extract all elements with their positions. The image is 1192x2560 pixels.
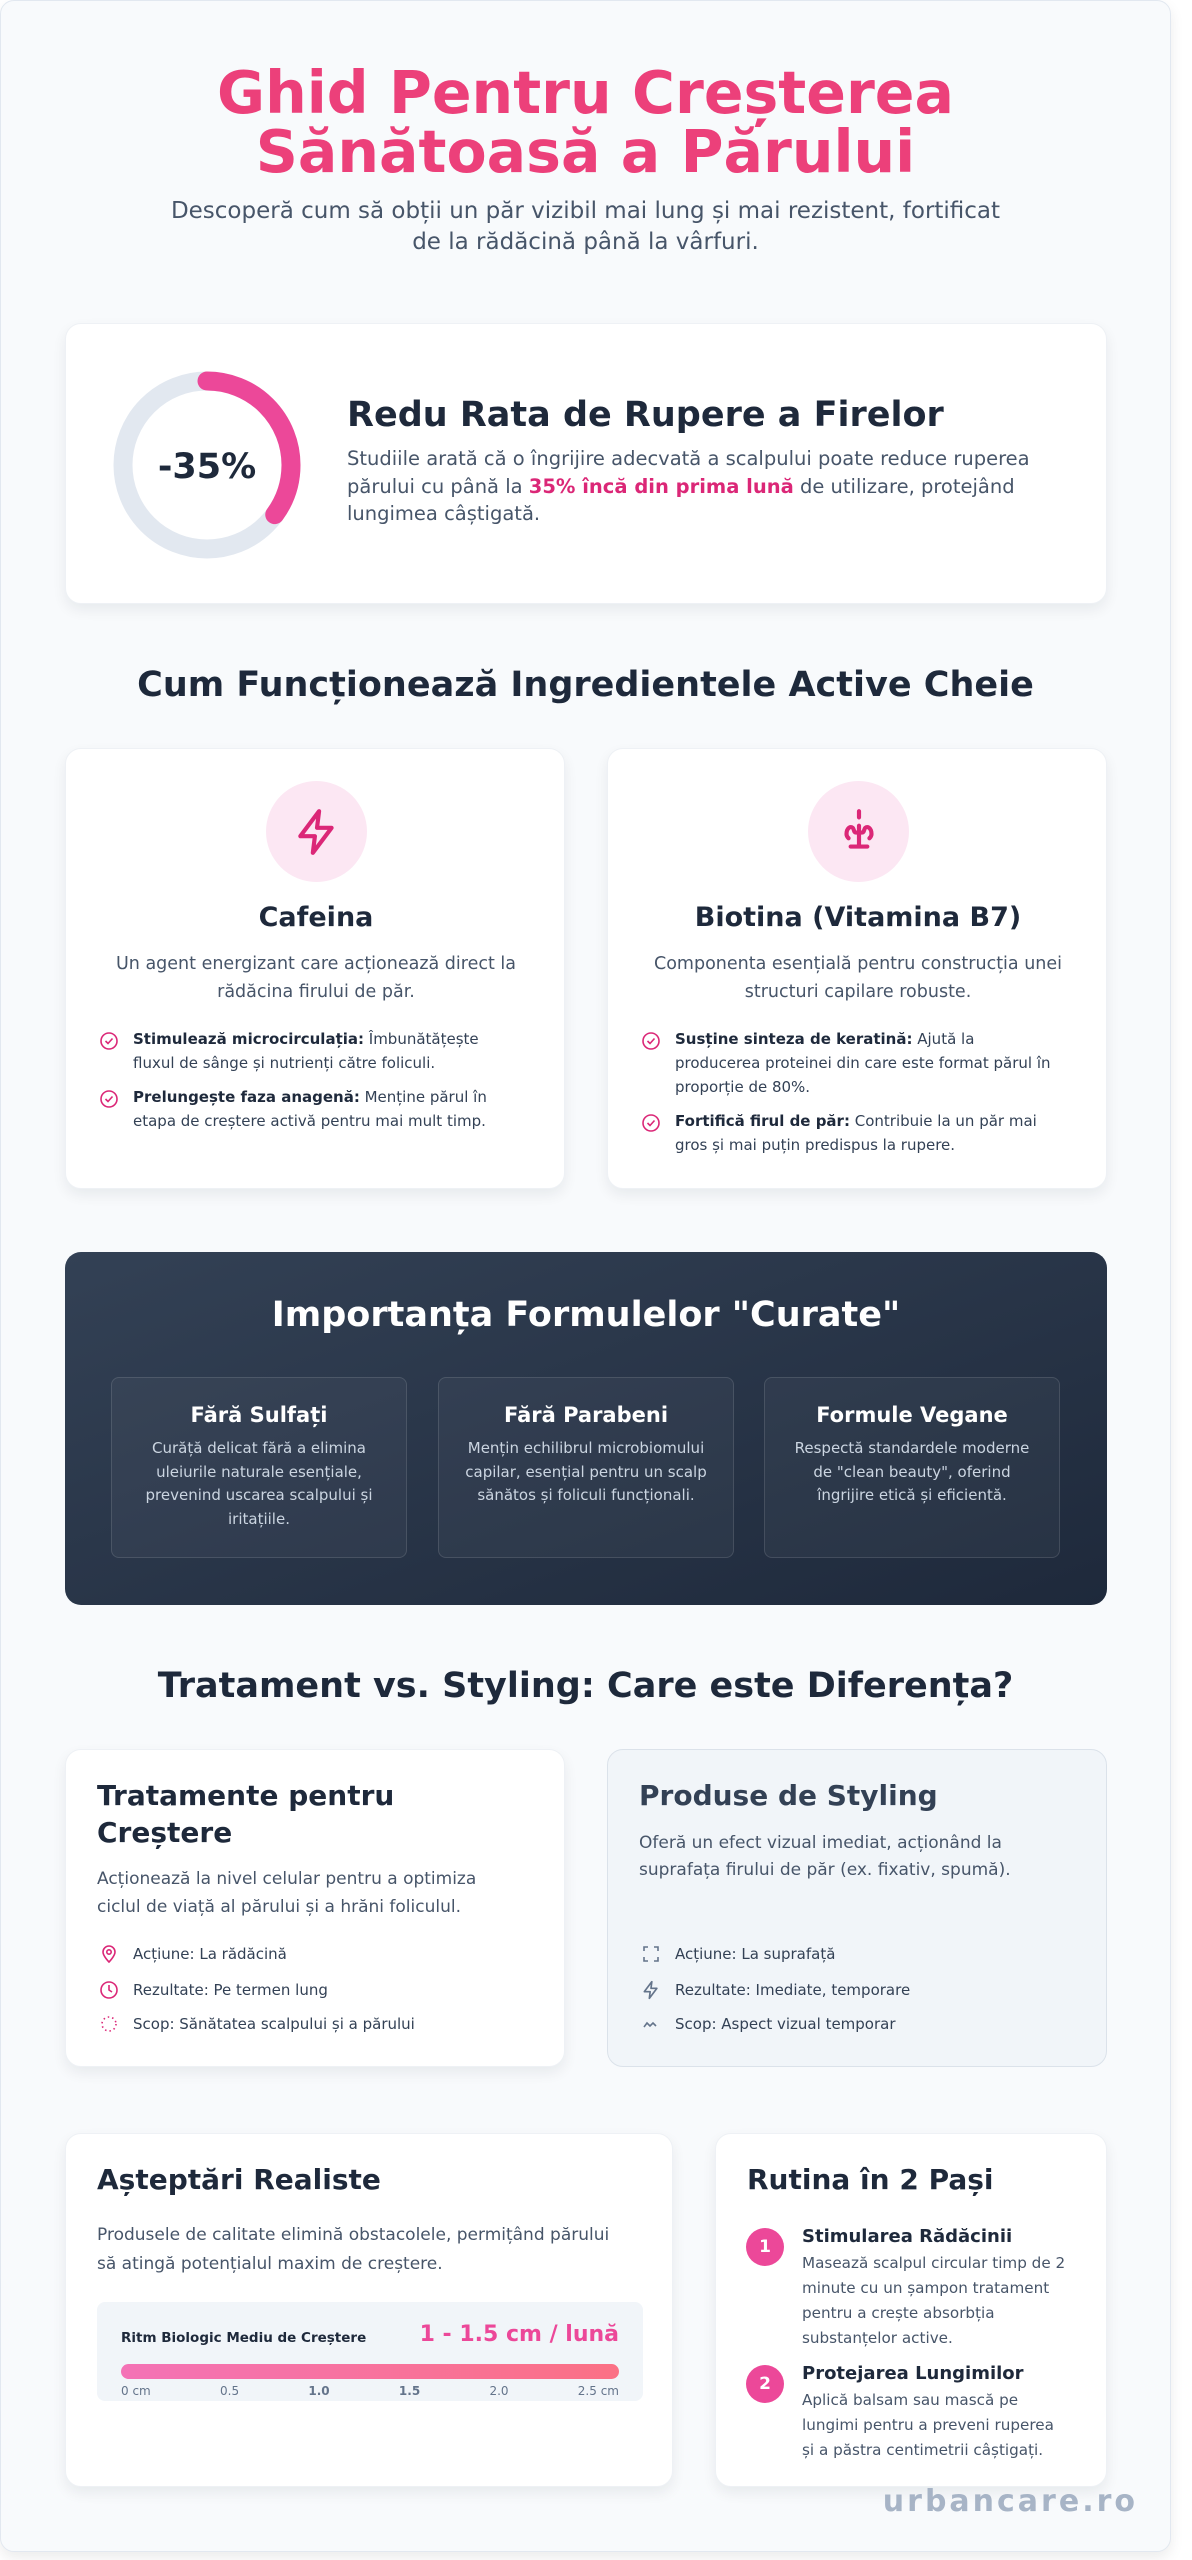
feature list: Rezultate: Imediate, temporare [675,1981,910,1999]
heading: treatment vs styling: Tratament vs. Styling: Care este Diferența? [158,1666,1013,1706]
growth bar chart: 0.5 [220,2384,239,2398]
stat heading: Redu Rata de Rupere a Firelor [347,395,944,435]
step 1: Masează scalpul circular timp de 2 minute cu un șampon tratament pentru a crește absorbția substanțelor active. [802,2254,1065,2347]
subtitle [171,198,1000,255]
step 2: 2 [759,2374,771,2394]
heading: Importanța Formulelor "Curate" [272,1295,900,1335]
box: sulfati: Fără Sulfați [191,1403,327,1427]
step 1 [746,2226,1065,2347]
title: Produse de Styling [639,1779,938,1812]
title: Cafeina [259,902,373,933]
brand watermark: urbancare.ro [883,2484,1138,2519]
donut chart: -35% [158,447,256,487]
feature list: Acțiune: La rădăcină [133,1945,287,1963]
growth bar chart: 2.0 [489,2384,509,2398]
growth bar chart: 1.0 [308,2384,330,2398]
bullet list: Susține sinteza de keratină: Ajută la producerea proteinei din care este format părul în proporție de 80%. [675,1030,1051,1096]
bullet list [100,1030,487,1130]
title: Tratamente pentru Creștere [97,1779,394,1849]
panel: treatments [65,1749,565,2067]
description: Produsele de calitate elimină obstacolele, permițând părului să atingă potențialul maxim de creștere. [97,2225,609,2274]
feature list: Rezultate: Pe termen lung [133,1981,328,1999]
description: Acționează la nivel celular pentru a optimiza ciclul de viață al părului și a hrăni foliculul. [97,1869,476,1917]
panel: styling [607,1749,1107,2067]
feature list: Scop: Aspect vizual temporar [675,2015,896,2033]
growth bar chart: 1.5 [399,2384,420,2398]
box: sulfati [111,1377,407,1558]
subtitle: Descoperă cum să obții un păr vizibil mai lung și mai rezistent, fortificat [171,198,1000,224]
growth bar chart: 1 - 1.5 cm / lună [420,2322,619,2347]
feature list [100,1945,415,2033]
step 1: Stimularea Rădăcinii [802,2226,1012,2247]
title [217,59,954,186]
panel: cafeina [65,748,565,1189]
feature list: Scop: Sănătatea scalpului și a părului [133,2015,415,2033]
growth bar chart: 0 cm [121,2384,151,2398]
feature list: Acțiune: La suprafață [675,1945,835,1963]
panel: realistic expectations [65,2133,673,2487]
bullet list: Prelungește faza anagenă: Menține părul în etapa de creștere activă pentru mai mult timp. [133,1088,487,1130]
description: Un agent energizant care acționează direct la rădăcina firului de păr. [116,954,516,1002]
step 2 [746,2363,1054,2459]
bullet list [642,1030,1051,1154]
step 2: Protejarea Lungimilor [802,2363,1024,2384]
growth bar chart [97,2302,643,2401]
title: Rutina în 2 Pași [747,2163,994,2196]
heading: ingredients: Cum Funcționează Ingredientele Active Cheie [137,665,1034,705]
title: Așteptări Realiste [97,2163,381,2196]
step 2: Aplică balsam sau mască pe lungimi pentru a preveni ruperea și a păstra centimetrii câștigați. [802,2391,1054,2459]
growth bar chart: Ritm Biologic Mediu de Creștere [121,2330,366,2346]
donut chart [114,372,300,558]
step 1: 1 [759,2237,771,2257]
panel: clean formulas [65,1252,1107,1605]
title: Sănătoasă a Părului [256,118,915,186]
panel: 2-step routine [715,2133,1107,2487]
icon: molecule [808,781,909,882]
bullet list: Stimulează microcirculația: Îmbunătățește fluxul de sânge și nutrienți către foliculi. [133,1030,479,1072]
panel: biotina [607,748,1107,1189]
stat text: Studiile arată că o îngrijire adecvată a scalpului poate reduce ruperea părului cu până la 35% încă din prima lună de utilizare, protejând lungimea câștigată. [347,447,1030,525]
box: vegane: Respectă standardele moderne de "clean beauty", oferind îngrijire etică și eficientă. [795,1439,1029,1504]
box: parabeni: Mențin echilibrul microbiomului capilar, esențial pentru un scalp sănătos și foliculi funcționali. [465,1439,707,1504]
description: Oferă un efect vizual imediat, acționând la suprafața firului de păr (ex. fixativ, spumă). [639,1833,1011,1880]
box: vegane: Formule Vegane [816,1403,1008,1427]
description: Componenta esențială pentru construcția unei structuri capilare robuste. [654,954,1062,1002]
box: sulfati: Curăță delicat fără a elimina uleiurile naturale esențiale, prevenind uscarea scalpului și iritațiile. [146,1439,372,1528]
title: Ghid Pentru Creșterea [217,59,954,127]
panel: stat card [65,323,1107,604]
title: Biotina (Vitamina B7) [695,902,1021,933]
bullet list: Fortifică firul de păr: Contribuie la un păr mai gros și mai puțin predispus la rupere. [675,1112,1037,1154]
icon: lightning [266,781,367,882]
box: vegane [764,1377,1060,1558]
growth bar chart: 2.5 cm [578,2384,619,2398]
feature list [643,1945,910,2033]
subtitle: de la rădăcină până la vârfuri. [412,229,759,255]
box: parabeni [438,1377,734,1558]
box: parabeni: Fără Parabeni [504,1403,668,1427]
